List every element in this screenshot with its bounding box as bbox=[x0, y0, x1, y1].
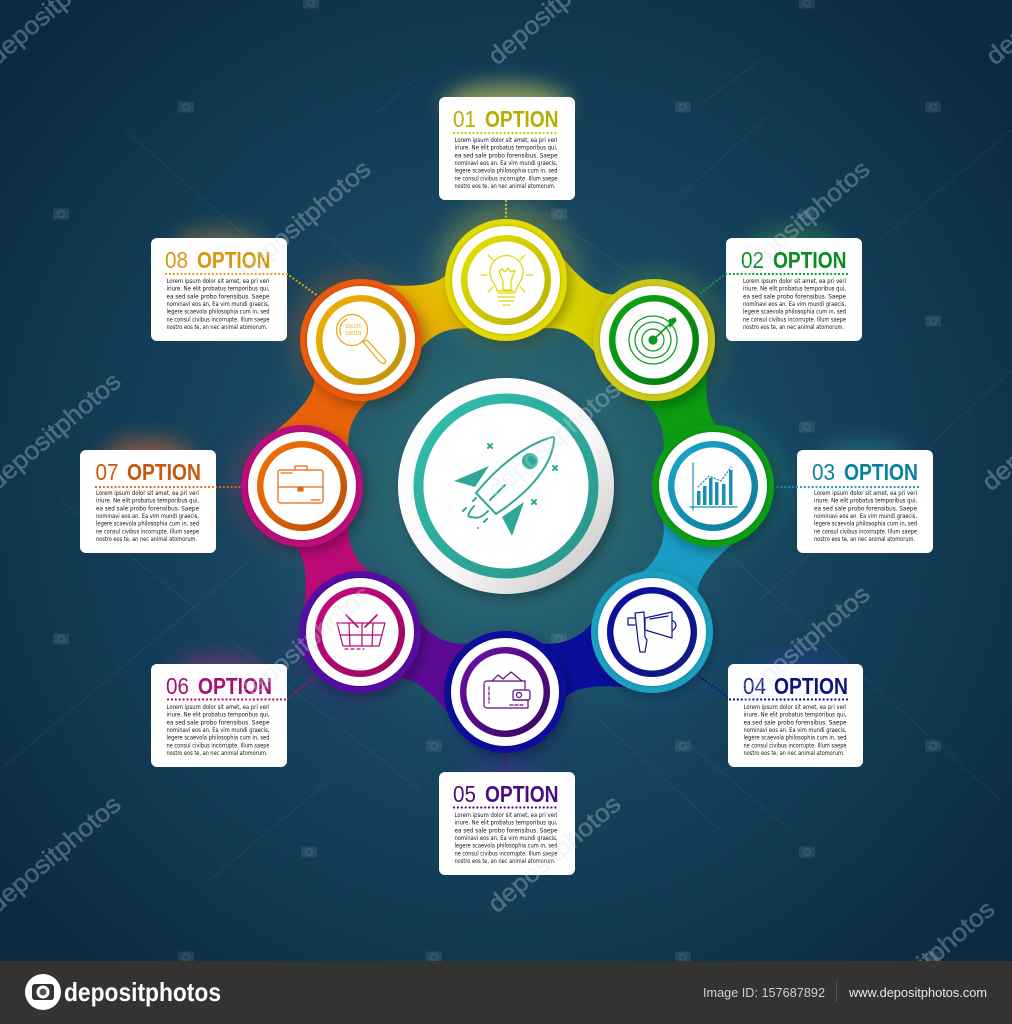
heading: 01 option: OPTION bbox=[485, 106, 558, 132]
heading: 03 option: OPTION bbox=[844, 459, 918, 485]
heading: 07 option: OPTION bbox=[127, 459, 201, 485]
icon: briefcase bbox=[278, 466, 323, 503]
icon: logo camera bbox=[25, 974, 61, 1010]
text block: legere scaevola philosophia cum in, sed bbox=[96, 521, 199, 528]
text block bbox=[96, 490, 199, 543]
watermarks: depositphotos bbox=[233, 155, 376, 284]
text block: nominavi eos an. Ea vim mundi graecis, bbox=[96, 513, 199, 520]
icon: rocket bbox=[454, 437, 557, 536]
panel: 08 option bbox=[151, 228, 287, 341]
text block: ea sed sale probo forensibus. Saepe bbox=[166, 719, 270, 726]
node 2: target bbox=[593, 279, 715, 401]
icon: megaphone bbox=[628, 612, 676, 652]
heading: 05 option bbox=[453, 781, 558, 807]
heading: 04 option: 04 bbox=[743, 673, 766, 699]
text block: ea sed sale probo forensibus. Saepe bbox=[743, 293, 846, 300]
text block: nominavi eos an. Ea vim mundi graecis, bbox=[166, 727, 270, 734]
logo wordmark: depositphotos bbox=[64, 977, 221, 1007]
text block: ea sed sale probo forensibus. Saepe bbox=[166, 293, 270, 300]
text block: legere scaevola philosophia cum in, sed bbox=[166, 735, 270, 742]
text block: nominavi eos an. Ea vim mundi graecis, bbox=[744, 727, 847, 734]
text block: ne consul civibus incorrupte. Illum saepe bbox=[814, 528, 917, 535]
panel: 03 option bbox=[797, 440, 933, 553]
heading: 05 option: OPTION bbox=[485, 781, 558, 807]
heading: 04 option bbox=[743, 673, 848, 699]
text block: ne consul civibus incorrupte. Illum saepe bbox=[743, 316, 846, 323]
text block: ne consul civibus incorrupte. Illum saepe bbox=[744, 742, 847, 749]
heading: 05 option: 05 bbox=[453, 781, 476, 807]
text block: Lorem ipsum dolor sit amet, ea pri veri bbox=[166, 278, 270, 285]
heading: 06 option: 06 bbox=[166, 673, 189, 699]
text block bbox=[454, 812, 558, 865]
node 8: magnifier bbox=[300, 279, 422, 401]
text block: nostro eos te, an nec animal atomorum. bbox=[454, 183, 556, 190]
heading: 03 option: 03 bbox=[812, 459, 835, 485]
text block: nominavi eos an. Ea vim mundi graecis, bbox=[454, 160, 558, 167]
text block: nominavi eos an. Ea vim mundi graecis, bbox=[814, 513, 917, 520]
text block: nostro eos te, an nec animal atomorum. bbox=[166, 750, 268, 757]
node 5: wallet bbox=[444, 631, 566, 753]
node 6: basket bbox=[299, 571, 421, 693]
icon: target bbox=[629, 316, 677, 364]
heading: 06 option: OPTION bbox=[198, 673, 272, 699]
text block bbox=[454, 137, 558, 190]
leader lines bbox=[216, 201, 797, 771]
text block bbox=[814, 490, 917, 543]
text block: Lorem ipsum dolor sit amet, ea pri veri bbox=[454, 812, 558, 819]
text block: nostro eos te, an nec animal atomorum. bbox=[166, 324, 268, 331]
text block: legere scaevola philosophia cum in, sed bbox=[814, 521, 917, 528]
watermarks: depositphotos bbox=[483, 375, 626, 504]
icon: magnifying glass: 100101 bbox=[345, 331, 362, 337]
ring connectors bbox=[254, 234, 758, 738]
text block: nostro eos te, an nec animal atomorum. bbox=[454, 858, 556, 865]
node 7: briefcase bbox=[241, 425, 363, 547]
node 1: lightbulb bbox=[445, 219, 567, 341]
text block: ea sed sale probo forensibus. Saepe bbox=[96, 505, 199, 512]
watermarks: depositphotos bbox=[732, 155, 875, 284]
node 4: megaphone bbox=[591, 571, 713, 693]
panel: 07 option bbox=[80, 438, 216, 553]
text block: legere scaevola philosophia cum in, sed bbox=[744, 735, 847, 742]
heading: 08 option bbox=[165, 247, 270, 273]
panel: 05 option bbox=[439, 762, 575, 875]
text block bbox=[166, 278, 270, 331]
text block: ne consul civibus incorrupte. Illum saepe bbox=[454, 850, 558, 857]
icon: shopping basket bbox=[337, 615, 385, 649]
text block: ne consul civibus incorrupte. Illum saepe bbox=[166, 316, 270, 323]
watermarks: depositphotos bbox=[732, 580, 875, 709]
text block: iriure. Ne elit probatus temporibus qui, bbox=[96, 498, 199, 505]
text block: iriure. Ne elit probatus temporibus qui, bbox=[166, 286, 270, 293]
coloured glows bbox=[232, 204, 785, 760]
text block: ea sed sale probo forensibus. Saepe bbox=[744, 719, 847, 726]
text block: nominavi eos an. Ea vim mundi graecis, bbox=[166, 301, 270, 308]
watermarks: depositphotos bbox=[233, 580, 376, 709]
text block: legere scaevola philosophia cum in, sed bbox=[454, 168, 558, 175]
text block: ea sed sale probo forensibus. Saepe bbox=[454, 152, 558, 159]
text block: nostro eos te, an nec animal atomorum. bbox=[743, 324, 844, 331]
text block: legere scaevola philosophia cum in, sed bbox=[743, 309, 846, 316]
icon: lightbulb bbox=[481, 255, 533, 305]
heading: 01 option: 01 bbox=[453, 106, 476, 132]
text block: legere scaevola philosophia cum in, sed bbox=[166, 309, 270, 316]
text block bbox=[166, 704, 270, 757]
text block: iriure. Ne elit probatus temporibus qui, bbox=[454, 820, 558, 827]
heading: 07 option bbox=[96, 459, 201, 485]
node 3: chart bbox=[652, 425, 774, 547]
text block: Lorem ipsum dolor sit amet, ea pri veri bbox=[166, 704, 270, 711]
panel: 02 option bbox=[726, 228, 862, 341]
heading: 02 option bbox=[741, 247, 846, 273]
text block: nominavi eos an. Ea vim mundi graecis, bbox=[454, 835, 558, 842]
heading: 01 option bbox=[453, 106, 558, 132]
text block: ne consul civibus incorrupte. Illum saepe bbox=[96, 528, 199, 535]
text block: Lorem ipsum dolor sit amet, ea pri veri bbox=[814, 490, 917, 497]
heading: 08 option: 08 bbox=[165, 247, 188, 273]
text block: nostro eos te, an nec animal atomorum. bbox=[96, 536, 197, 543]
text block: nostro eos te, an nec animal atomorum. bbox=[814, 536, 915, 543]
website url: www.depositphotos.com bbox=[848, 986, 987, 1000]
text block: ne consul civibus incorrupte. Illum saepe bbox=[454, 175, 558, 182]
central circle: rocket bbox=[398, 378, 614, 594]
text block: Lorem ipsum dolor sit amet, ea pri veri bbox=[744, 704, 847, 711]
heading: 06 option bbox=[166, 673, 272, 699]
text block: iriure. Ne elit probatus temporibus qui, bbox=[744, 712, 847, 719]
text block: iriure. Ne elit probatus temporibus qui, bbox=[743, 286, 846, 293]
text block: ea sed sale probo forensibus. Saepe bbox=[454, 827, 558, 834]
text block: Lorem ipsum dolor sit amet, ea pri veri bbox=[96, 490, 199, 497]
heading: 08 option: OPTION bbox=[197, 247, 270, 273]
heading: 04 option: OPTION bbox=[774, 673, 848, 699]
text block bbox=[744, 704, 847, 757]
watermarks: depositphotos bbox=[483, 790, 626, 919]
panel: 04 option bbox=[728, 654, 863, 767]
heading: 07 option: 07 bbox=[96, 459, 118, 485]
watermarks: depositphotos bbox=[857, 895, 1000, 1024]
text block: legere scaevola philosophia cum in, sed bbox=[454, 843, 558, 850]
text block: ne consul civibus incorrupte. Illum saepe bbox=[166, 742, 270, 749]
heading: 02 option: 02 bbox=[741, 247, 764, 273]
icon: wallet bbox=[484, 672, 530, 708]
footer bar bbox=[0, 961, 1012, 1024]
text block: iriure. Ne elit probatus temporibus qui, bbox=[814, 498, 917, 505]
icon: magnifying glass: 101101 bbox=[345, 324, 362, 330]
icon: bar chart bbox=[690, 463, 737, 510]
text block: nominavi eos an. Ea vim mundi graecis, bbox=[743, 301, 846, 308]
text block bbox=[743, 278, 846, 331]
heading: 03 option bbox=[812, 459, 918, 485]
text block: ea sed sale probo forensibus. Saepe bbox=[814, 505, 917, 512]
heading: 02 option: OPTION bbox=[773, 247, 846, 273]
text block: Lorem ipsum dolor sit amet, ea pri veri bbox=[743, 278, 846, 285]
text block: iriure. Ne elit probatus temporibus qui, bbox=[454, 145, 558, 152]
text block: nostro eos te, an nec animal atomorum. bbox=[744, 750, 845, 757]
image id: Image ID: 157687892 bbox=[703, 986, 825, 1000]
text block: Lorem ipsum dolor sit amet, ea pri veri bbox=[454, 137, 558, 144]
icon: magnifying glass bbox=[336, 314, 386, 364]
text block: iriure. Ne elit probatus temporibus qui, bbox=[166, 712, 270, 719]
panel: 01 option bbox=[439, 83, 575, 200]
panel: 06 option bbox=[151, 654, 287, 767]
